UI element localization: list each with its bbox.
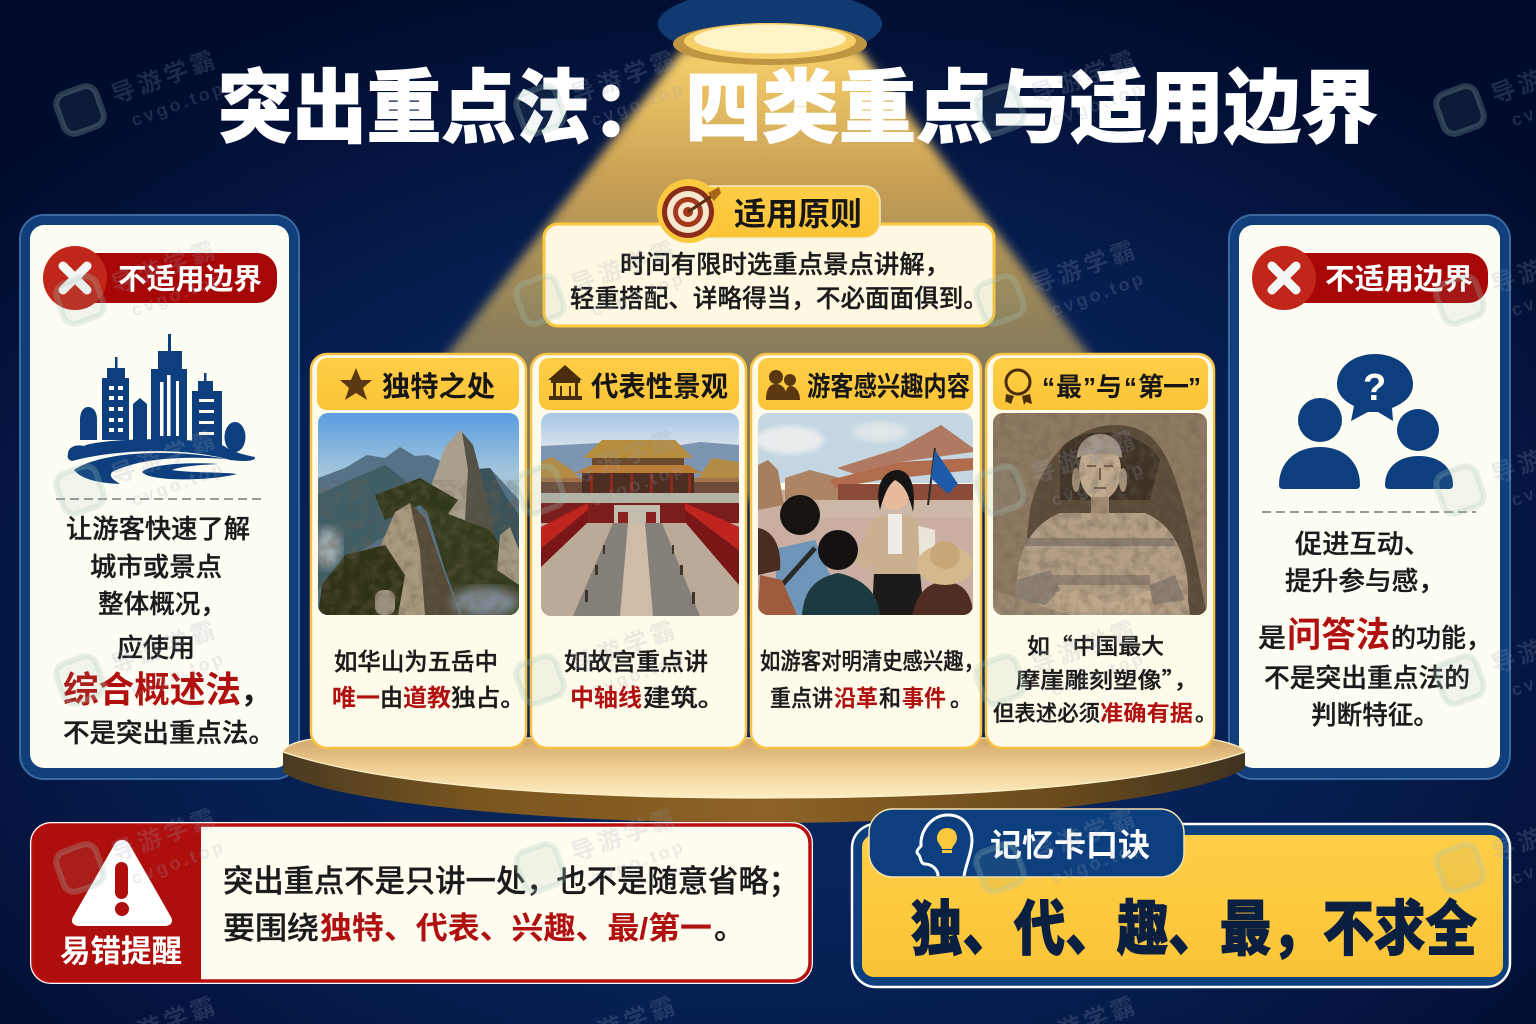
card 3 text: 如游客对明清史感兴趣， [760, 648, 984, 674]
title: ： [592, 68, 668, 153]
card 2 text: 如故宫重点讲 [564, 649, 708, 676]
image: Forbidden City central axis [541, 413, 739, 616]
ceiling lamp [658, 0, 882, 65]
card 3 text: 事件 [902, 685, 946, 711]
spotlight beam [336, 50, 1200, 500]
left heading badge: 不适用边界 [118, 263, 262, 296]
image: Yungang Buddha statue [993, 413, 1207, 615]
right panel text: 问答法 [1287, 616, 1390, 655]
watermarks: 导游学霸 [108, 236, 222, 299]
reminder text: 独特、代表、兴趣、最/第一 [320, 911, 712, 946]
card 2 text: 中轴线 [570, 685, 642, 712]
watermarks: cvgo.top [1048, 78, 1148, 130]
watermarks: 导游学霸 [108, 46, 222, 109]
panel: common mistake reminder [31, 823, 812, 983]
card 3 heading [758, 358, 973, 410]
panel: left not-applicable boundary [20, 215, 299, 779]
watermarks: 导游学霸 [1028, 426, 1142, 489]
panel: right not-applicable boundary [1229, 215, 1510, 779]
watermarks: cvgo.top [1048, 458, 1148, 510]
card 2 text: 建筑。 [643, 685, 725, 712]
left heading badge [43, 246, 277, 310]
card 3 text: 重点讲 [770, 685, 833, 711]
right panel text: 判断特征。 [1311, 700, 1439, 730]
right panel text: 促进互动、 [1295, 529, 1431, 559]
card 1 text: 道教 [403, 685, 451, 712]
card 1 text [332, 649, 525, 712]
watermarks: 导游学霸 [1028, 616, 1142, 679]
title [218, 64, 1378, 153]
icon: two people with question bubble: ? [1363, 367, 1386, 409]
card 3 text: 和 [879, 685, 901, 711]
reminder label: 易错提醒 [60, 934, 182, 969]
card 1 text: 由 [380, 685, 403, 712]
left panel text: 不是突出重点法。 [63, 718, 275, 748]
card 3 text: 沿革 [834, 685, 878, 711]
watermarks: 导游学霸 [568, 236, 682, 299]
watermarks: 导游学霸 [568, 46, 682, 109]
mnemonic heading tab: 记忆卡口诀 [990, 827, 1150, 863]
left panel text: 让游客快速了解 [66, 514, 250, 544]
right heading badge: 不适用边界 [1325, 263, 1473, 296]
sub: guide [855, 448, 958, 615]
watermarks: cvgo.top [1048, 836, 1148, 888]
watermarks: cvgo.top [1048, 268, 1148, 320]
card 1 heading: 独特之处 [382, 371, 495, 402]
card: the most and the first [986, 354, 1217, 748]
watermarks: cvgo.top [128, 648, 228, 700]
card: tourist interests [751, 354, 984, 748]
watermarks: 导游学霸 [568, 426, 682, 489]
right panel text: 不是突出重点法的 [1264, 663, 1470, 693]
left panel text: 整体概况， [98, 589, 226, 619]
watermarks: 导游学霸 [568, 616, 682, 679]
watermarks: 导游学霸 [1028, 236, 1142, 299]
watermarks: 导游学霸 [568, 804, 682, 867]
principle heading pill [664, 186, 880, 238]
watermarks: cvgo.top [128, 268, 228, 320]
title: 四类重点与适用边界 [685, 64, 1378, 153]
left panel text [63, 514, 275, 748]
watermarks: cvgo.top [588, 648, 688, 700]
watermarks: cvgo.top [588, 268, 688, 320]
watermarks: cvgo.top [1048, 648, 1148, 700]
right panel text: 的功能， [1391, 623, 1491, 653]
sub: visitors [758, 495, 973, 615]
icon: city skyline [68, 334, 255, 484]
principle text: 轻重搭配、详略得当，不必面面俱到。 [570, 285, 988, 313]
watermarks: 导游学霸 [1028, 46, 1142, 109]
left panel text: 综合概述法 [63, 669, 241, 710]
card: representative landscape [531, 354, 746, 748]
left panel text: ， [240, 673, 272, 709]
watermarks: cvgo.top [128, 78, 228, 130]
right panel text: 提升参与感， [1285, 566, 1445, 596]
right panel text: 是 [1258, 623, 1286, 653]
watermarks: 导游学霸 [108, 426, 222, 489]
card 4 text: 如“中国最大 [1027, 629, 1164, 661]
icon: two people with question bubble [1279, 354, 1453, 489]
reminder text [223, 864, 799, 946]
principle heading pill: 适用原则 [734, 196, 862, 232]
title: 突出重点法 [218, 64, 590, 153]
left panel text: 应使用 [117, 633, 195, 663]
watermarks: cvgo.top [588, 458, 688, 510]
watermarks: 导游学霸 [1028, 804, 1142, 867]
watermarks: cvgo.top [588, 78, 688, 130]
watermarks: cvgo.top [128, 836, 228, 888]
stage podium [283, 738, 1245, 823]
panel: memory card mnemonic [852, 809, 1510, 987]
card 1 heading [317, 358, 519, 410]
card 3 heading: 游客感兴趣内容 [807, 371, 970, 402]
icon: target with arrow [657, 179, 721, 243]
image: Huashan mountain [315, 413, 519, 617]
card 4 text: 摩崖雕刻塑像”， [1016, 663, 1198, 695]
panel: applicable principle [544, 179, 994, 326]
principle text: 时间有限时选重点景点讲解， [620, 251, 950, 279]
reminder text: 要围绕 [223, 911, 319, 946]
reminder text: 。 [714, 911, 745, 946]
card 1 text: 独占。 [451, 685, 525, 712]
card: unique features [311, 354, 526, 748]
watermarks: cvgo.top [128, 458, 228, 510]
watermarks: cvgo.top [588, 836, 688, 888]
card 1 text: 唯一 [332, 685, 380, 712]
image: tour guide with visitors [756, 413, 973, 615]
card 3 text: 。 [950, 685, 973, 711]
card 4 text: 准确有据 [1100, 701, 1193, 726]
principle text [570, 251, 988, 313]
icon: warning triangle [72, 840, 172, 926]
card 4 heading [993, 358, 1208, 410]
right panel text [1258, 529, 1491, 730]
watermarks: 导游学霸 [108, 616, 222, 679]
card 3 text [760, 648, 984, 711]
reminder text: 突出重点不是只讲一处，也不是随意省略； [223, 864, 799, 899]
left panel text: 城市或景点 [90, 552, 222, 582]
card 4 text [993, 629, 1217, 726]
mnemonic heading tab [869, 809, 1184, 877]
watermarks: 导游学霸 [108, 804, 222, 867]
card 2 text [564, 649, 725, 712]
card 2 heading: 代表性景观 [591, 371, 728, 402]
card 2 heading [539, 358, 739, 410]
card 1 text: 如华山为五岳中 [334, 649, 498, 676]
card 4 text: 。 [1195, 701, 1217, 726]
card 4 text: 但表述必须 [993, 701, 1100, 726]
icon: head with lightbulb [917, 815, 972, 876]
right heading badge [1252, 246, 1488, 310]
card 4 heading: “最”与“第一” [1042, 372, 1201, 402]
